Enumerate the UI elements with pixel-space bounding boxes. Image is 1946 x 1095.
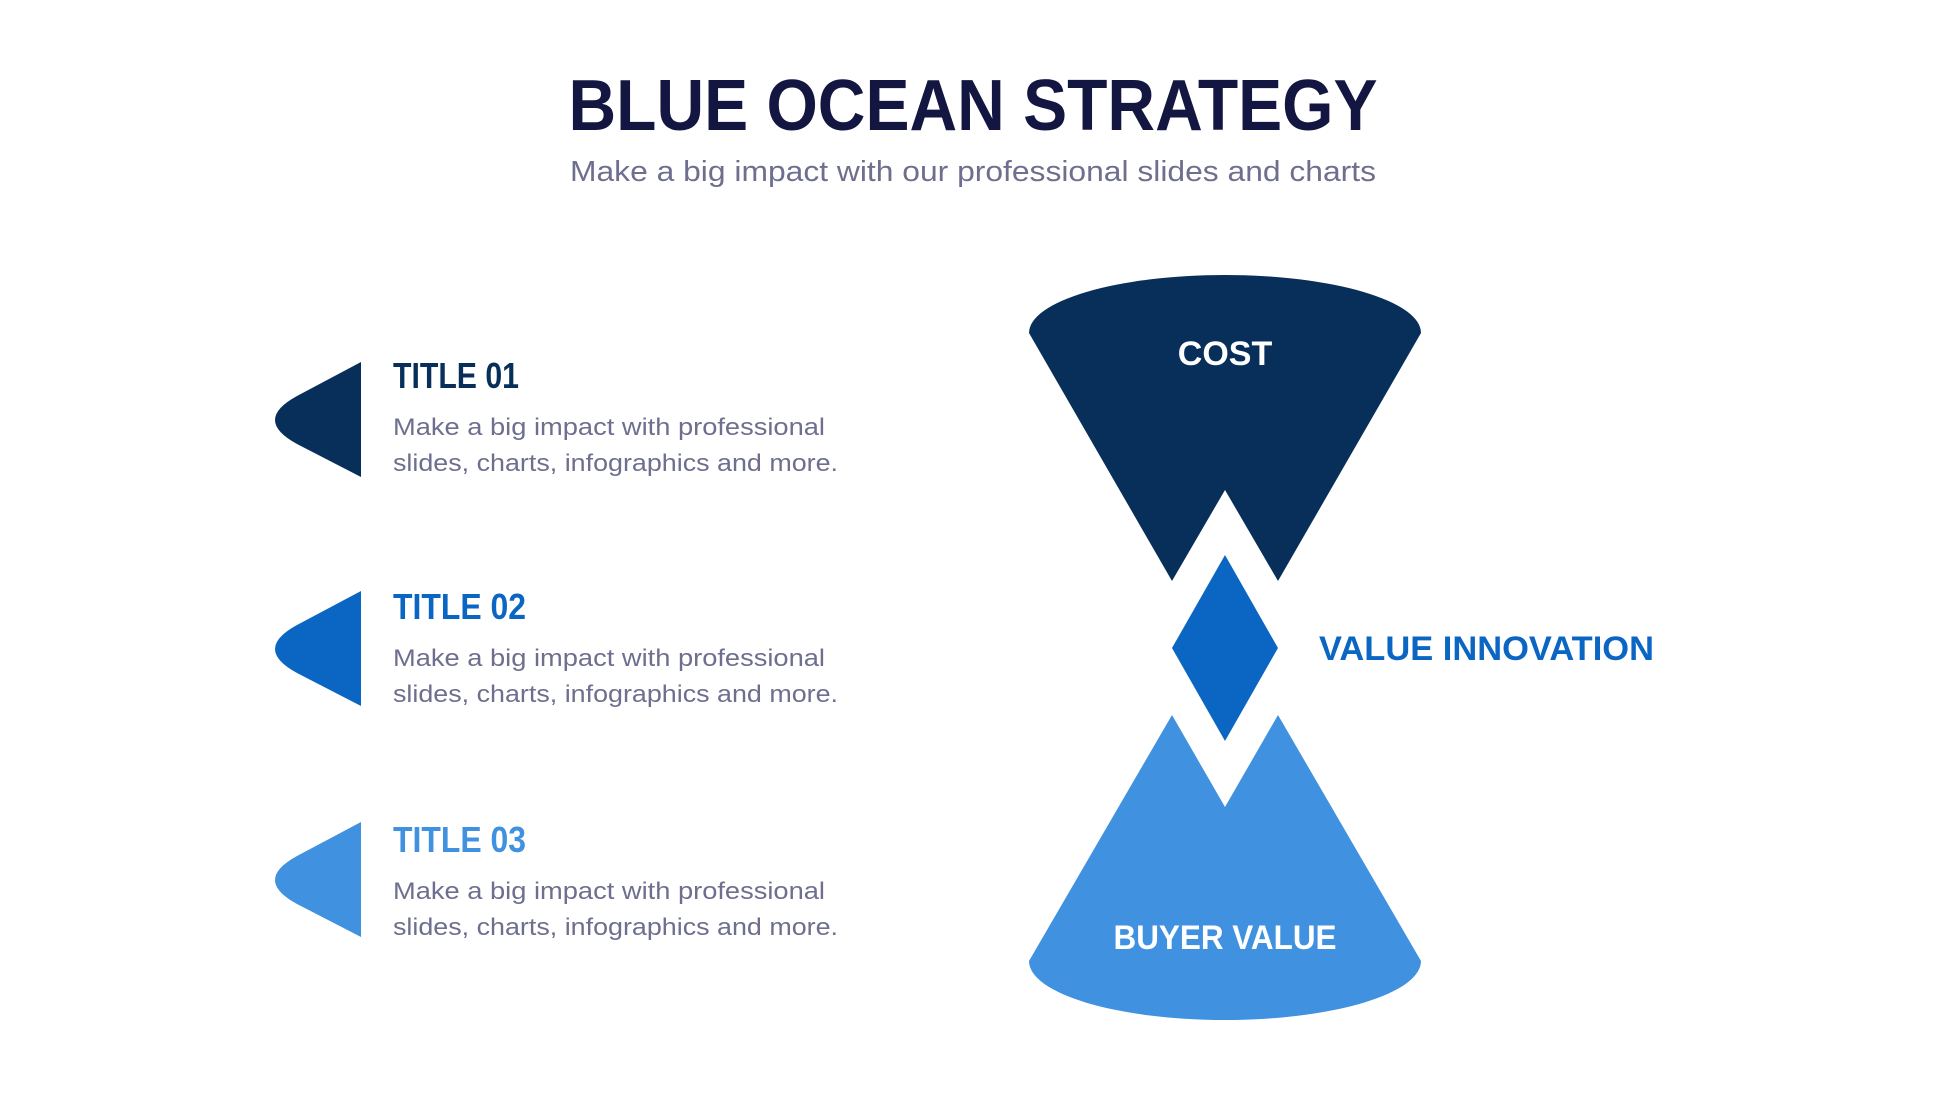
icon: arrow shape 1	[275, 362, 361, 477]
text 02: slides, charts, infographics and more.	[393, 681, 838, 708]
shape: buyer value	[1029, 715, 1421, 1020]
label: cost: COST	[1178, 335, 1272, 373]
text 02: Make a big impact with professional	[393, 645, 825, 672]
title: BLUE OCEAN STRATEGY	[568, 66, 1378, 146]
icon: arrow shape 2	[275, 591, 361, 706]
item 1	[275, 355, 838, 477]
diagram	[1029, 275, 1654, 1020]
title 02: TITLE 02	[393, 586, 526, 627]
text 01: Make a big impact with professional	[393, 414, 825, 441]
label: value innovation: VALUE INNOVATION	[1319, 630, 1654, 668]
text 03: Make a big impact with professional	[393, 878, 825, 905]
shape: value innovation diamond	[1172, 555, 1278, 741]
title 01: TITLE 01	[393, 355, 519, 396]
shape: cost	[1029, 275, 1421, 581]
item 3	[275, 819, 838, 941]
text 01: slides, charts, infographics and more.	[393, 450, 838, 477]
icon: arrow shape 3	[275, 822, 361, 937]
item 2	[275, 586, 838, 708]
text 03: slides, charts, infographics and more.	[393, 914, 838, 941]
label: buyer value: BUYER VALUE	[1114, 919, 1336, 957]
subtitle: Make a big impact with our professional slides and charts	[570, 156, 1376, 188]
title 03: TITLE 03	[393, 819, 526, 860]
